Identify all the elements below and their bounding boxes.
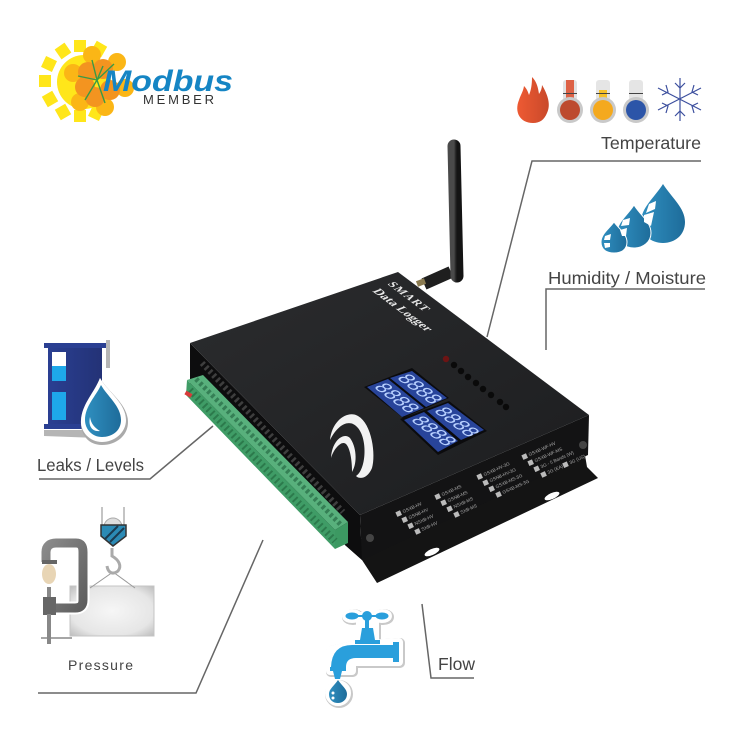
panel: temperature [517,77,701,153]
label: Flow: Flow [438,654,475,674]
front panel model labels: GSXB-HV [402,501,424,514]
data logger device [184,272,598,583]
icon: cold thermometer [623,80,649,123]
front panel model labels [395,432,586,539]
label: Humidity / Moisture: Humidity / Moisture [548,268,706,288]
front panel model labels: 3G (US) [569,454,586,465]
front panel model labels: NSXB-HV [414,513,435,526]
front panel model labels: GSXB-MS [441,484,462,497]
label: Leaks / Levels: Leaks / Levels [37,455,144,475]
front panel model labels: GSXB-WF-HV [528,440,557,457]
front panel model labels: GSXB-HV-3G [483,461,511,477]
LED displays: 8888 [391,372,447,407]
screws [366,441,587,542]
logo: Modbus member [39,40,233,122]
side face [190,343,362,560]
LED displays: 8888 [428,405,484,440]
device title: SMART [384,281,432,313]
front panel model labels: 3G (EA) [547,463,564,475]
terminal block [184,375,348,549]
antenna [417,146,457,284]
sun icon [39,40,134,122]
icon: water drops [601,184,685,253]
icon: crane hook [101,507,126,573]
LED displays: 8888 [368,381,424,416]
front panel model labels: GSNB-HV-3G [489,467,517,483]
front panel model labels: NSXB-MS [453,496,474,509]
LED displays [364,368,487,455]
panel: humidity [548,184,706,288]
icon: warm thermometer [590,80,616,123]
mounting flange [345,455,598,583]
front face [360,415,589,560]
front panel model labels: SXB-HV [421,520,439,532]
connector lines [38,161,705,693]
front panel model labels: GSNB-HV [408,507,430,520]
front panel model labels: GSNB-MS [447,490,468,503]
icon: snowflake [658,78,701,121]
icon: faucet [329,611,400,703]
icon: tank [44,340,110,438]
LED displays: 8888 [405,414,461,449]
icon: drop [81,378,128,445]
icon: flame [517,77,549,123]
top face [190,272,589,515]
front panel model labels: 3G - 5 Bands (W) [540,450,575,469]
front panel model labels: GSXB-MS-3G [502,478,530,495]
Modbus wordmark: Modbus [103,65,233,98]
front panel model labels: GSXB-WF-MS [534,446,563,463]
device title: Data Logger [369,287,437,333]
LED indicators [443,356,509,410]
panel: pressure [41,507,154,673]
panel: leaks and levels [37,340,144,475]
brand swirl [330,414,373,478]
panel: flow [329,611,475,703]
icon: C-clamp with egg [41,543,83,644]
label: Temperature: Temperature [601,133,701,153]
front panel model labels: SXB-MS [460,503,478,515]
icon: suspended plate [70,572,154,636]
label: Pressure: Pressure [68,657,133,673]
MEMBER label: MEMBER [143,92,214,107]
front panel model labels: GSXB-MS-3G [495,473,524,489]
icon: hot thermometer [557,80,583,123]
